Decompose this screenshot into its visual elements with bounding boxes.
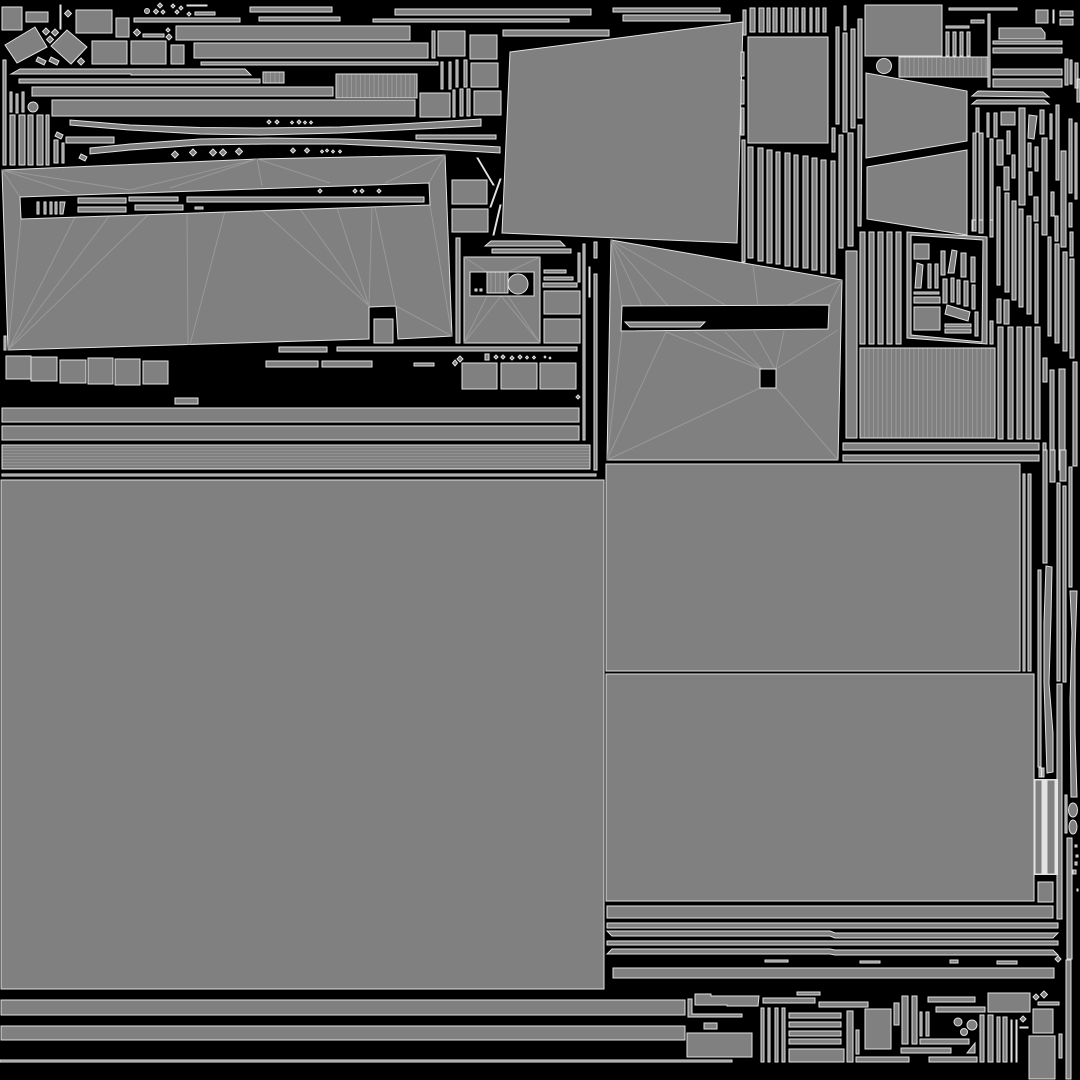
panel: left large polygon with cut-out bbox=[2, 155, 452, 350]
panel: small square with cut-out bbox=[464, 257, 540, 343]
bright framed bars bbox=[1034, 779, 1058, 875]
panel: top rectangle bbox=[748, 37, 828, 143]
panel: upper right rectangle and circle bbox=[865, 5, 988, 77]
top centre small squares bbox=[420, 31, 501, 117]
top small diamonds and dots bbox=[134, 3, 215, 40]
panel: top centre quad bbox=[502, 22, 743, 243]
far right long bars bbox=[1023, 450, 1077, 1079]
panel: right centre polygon with cut-outs bbox=[607, 240, 842, 460]
panel: lined rectangle bbox=[860, 348, 995, 438]
curved strips bbox=[55, 119, 500, 161]
panel: right lower rectangle bbox=[606, 674, 1034, 901]
panel: right upper rectangle bbox=[606, 464, 1020, 671]
upper right misc pieces bbox=[946, 8, 1080, 104]
row of small squares bbox=[6, 356, 168, 385]
top long strips bbox=[11, 7, 730, 116]
strips: below left polygon bbox=[2, 408, 596, 476]
small pieces beside left polygon bbox=[4, 158, 597, 470]
ovals and small dots bbox=[1038, 803, 1078, 902]
middle strips and squares bbox=[175, 347, 580, 404]
bottom left strips bbox=[0, 1000, 732, 1062]
diamonds row bbox=[172, 120, 342, 158]
right dense vertical bars bbox=[972, 105, 1077, 470]
descending vertical bars bbox=[748, 133, 1039, 461]
bottom right cluster bbox=[687, 991, 1062, 1079]
top left square cluster bbox=[2, 5, 184, 65]
nested frame with small pieces bbox=[907, 232, 987, 344]
panel: large square bbox=[1, 480, 604, 989]
strip: lined band bbox=[2, 445, 590, 469]
panel: right quads bbox=[866, 73, 967, 235]
top vertical bars bbox=[741, 6, 862, 262]
left vertical bars bbox=[3, 60, 496, 165]
right lower strips bbox=[607, 906, 1061, 978]
